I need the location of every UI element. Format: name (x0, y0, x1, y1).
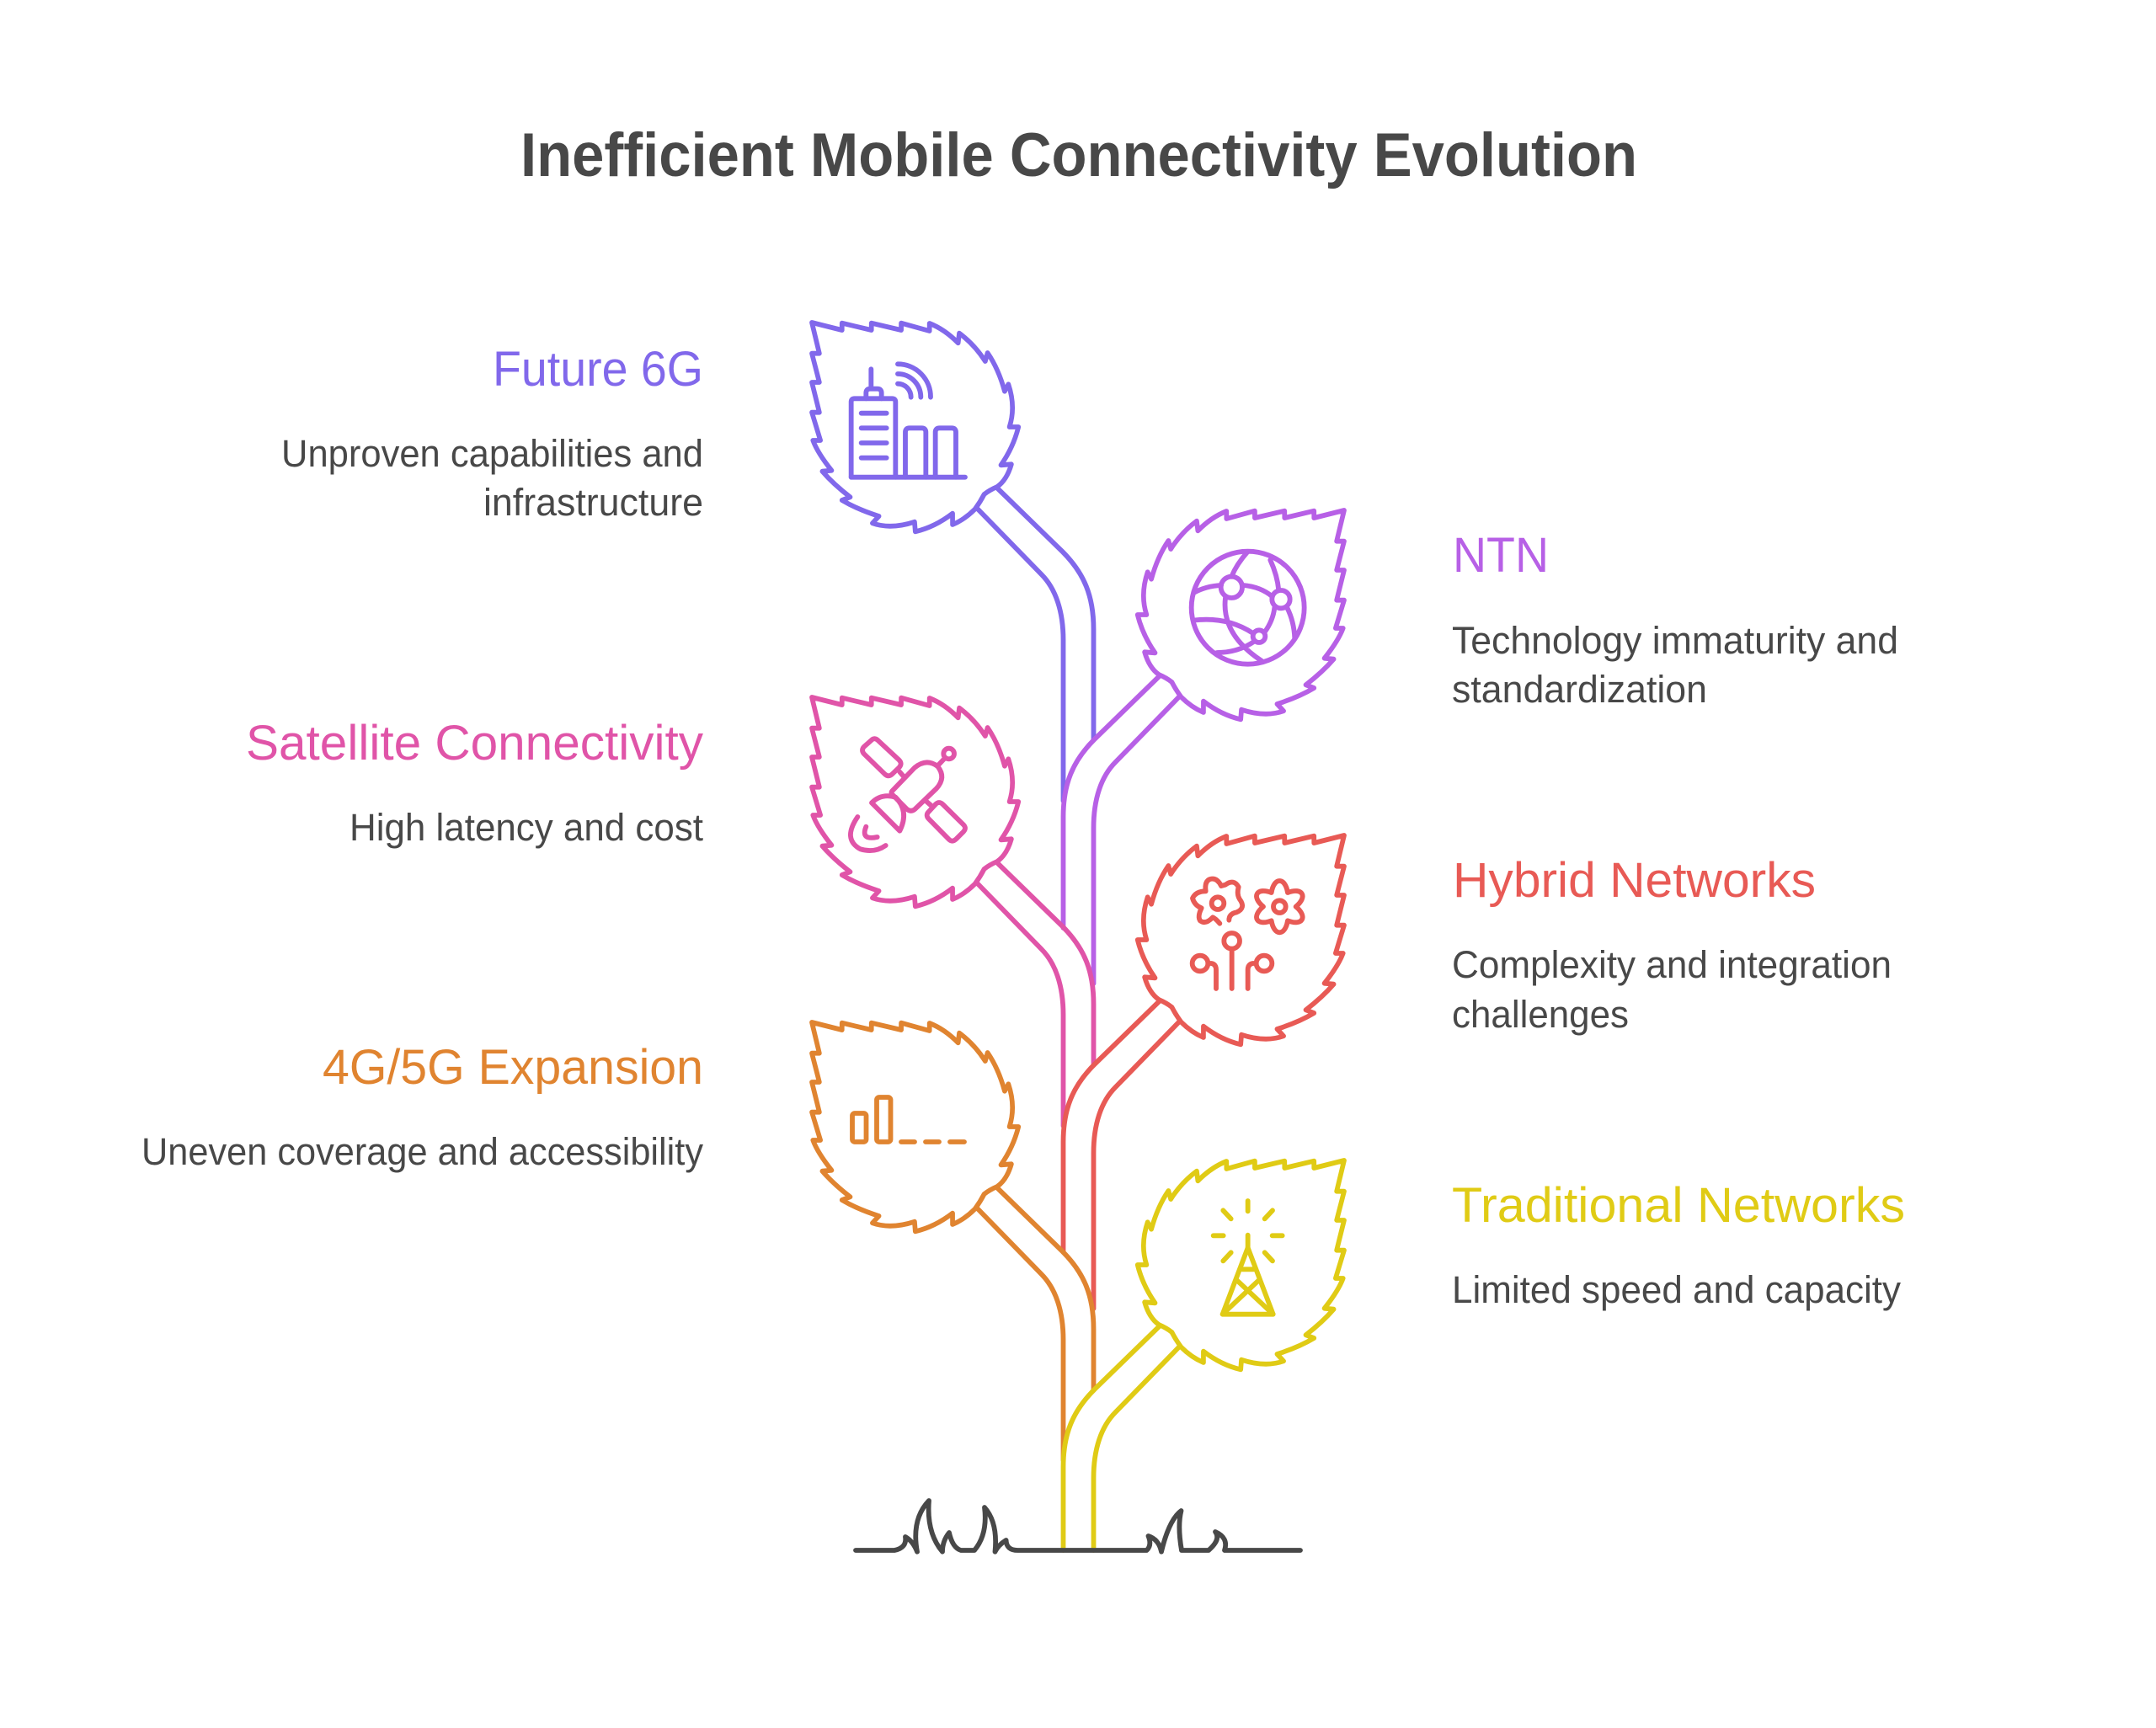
leaf: Satellite Connectivity (812, 697, 1018, 906)
stem: NTN (1063, 676, 1179, 984)
label: NTN: NTN (1453, 528, 1549, 583)
description: Traditional Networks: Limited speed and capacity (1452, 1268, 1901, 1311)
label: Hybrid Networks: Hybrid Networks (1453, 853, 1816, 908)
branch: Satellite Connectivity (246, 697, 1093, 1126)
ground with grass (856, 1501, 1300, 1552)
description: Hybrid Networks: challenges (1452, 993, 1629, 1036)
leaf: Traditional Networks (1138, 1160, 1344, 1369)
label: Future 6G: Future 6G (493, 342, 703, 397)
leaf: NTN (1138, 510, 1344, 719)
icon: satellite (851, 739, 965, 851)
description: Future 6G: infrastructure (483, 481, 703, 524)
leaf: 4G/5G Expansion (812, 1022, 1018, 1231)
description: Hybrid Networks (1452, 943, 1892, 1036)
description: NTN (1452, 619, 1898, 711)
description: Satellite Connectivity: High latency and cost (350, 806, 703, 849)
branch: NTN (1063, 510, 1898, 984)
icon: city buildings with signal (851, 364, 965, 477)
stem: Traditional Networks (1063, 1326, 1179, 1550)
label: Satellite Connectivity: Satellite Connectivity (246, 716, 703, 771)
label: 4G/5G Expansion: 4G/5G Expansion (323, 1040, 703, 1095)
stem: 4G/5G Expansion (977, 1188, 1093, 1460)
description: 4G/5G Expansion: Uneven coverage and accessibility (141, 1130, 703, 1173)
leaf: Hybrid Networks (1138, 835, 1344, 1044)
title: Inefficient Mobile Connectivity Evolution (520, 121, 1637, 189)
branch: 4G/5G Expansion (141, 1022, 1093, 1460)
stem: Hybrid Networks (1063, 1001, 1179, 1309)
description: Hybrid Networks: Complexity and integration (1452, 943, 1892, 986)
leaf: Future 6G (812, 323, 1018, 531)
description: Future 6G: Unproven capabilities and (281, 432, 703, 475)
description: NTN: Technology immaturity and (1452, 619, 1898, 662)
branch: Hybrid Networks (1063, 835, 1892, 1309)
branch: Future 6G (281, 323, 1093, 801)
icon: gears and circuit (1193, 879, 1303, 989)
icon: radio tower (1214, 1201, 1283, 1315)
branch: Traditional Networks (1063, 1160, 1905, 1550)
stem: Satellite Connectivity (977, 863, 1093, 1126)
icon: signal bars (852, 1097, 964, 1142)
description: Future 6G (281, 432, 703, 524)
icon: globe network (1192, 552, 1305, 664)
stem: Future 6G (977, 488, 1093, 801)
description: NTN: standardization (1452, 668, 1707, 711)
label: Traditional Networks: Traditional Networks (1452, 1178, 1905, 1233)
